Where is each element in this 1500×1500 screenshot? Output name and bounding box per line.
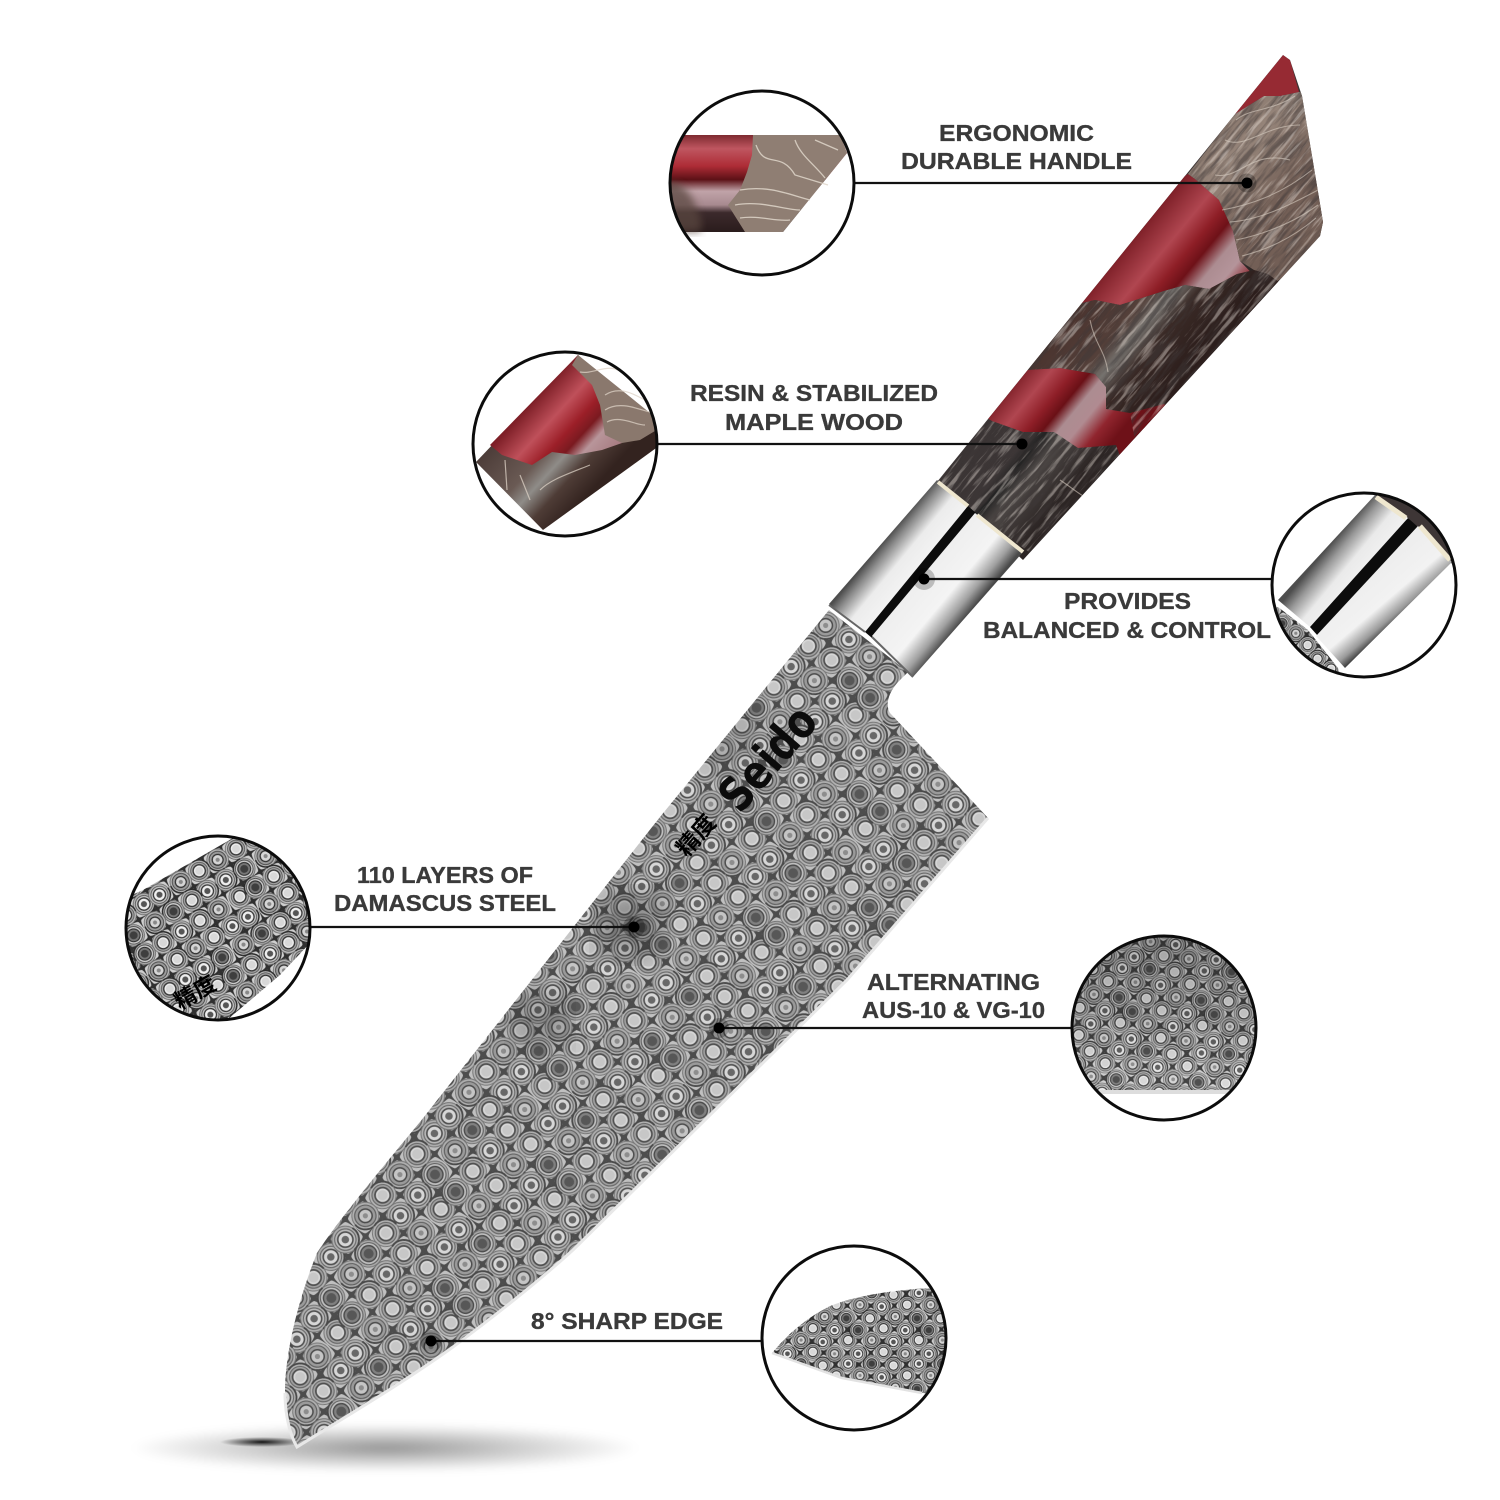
callout: resin pointer [658,438,1028,450]
label: 110 layers of damascus steel: DAMASCUS STEEL [334,890,556,916]
handle: brown stabilized maple cap [1188,92,1323,281]
callout: bolster pointer [913,568,1272,590]
inset: bolster [1270,492,1458,678]
blade with damascus pattern [280,600,1000,1460]
label: ergonomic durable handle: ERGONOMIC [939,120,1094,146]
handle: main red resin [1082,174,1250,305]
inset: alternating steel [1065,930,1265,1120]
handle: wood grain texture [938,92,1322,552]
label: provides balanced and control: PROVIDES [1064,588,1191,614]
handle [334,0,1500,972]
inset: handle end [660,91,854,275]
handle: pale grain lines [1060,96,1318,500]
bolster end shading [829,605,913,677]
label: resin and stabilized maple wood [690,380,938,435]
handle: central dark wood [1028,270,1278,438]
callout: alternating steel pointer [709,1018,1072,1038]
logo: Seido: 精度 [667,806,722,863]
label: alternating aus-10 and vg-10: ALTERNATING [867,969,1040,995]
label: provides balanced and control: BALANCED & CONTROL [983,617,1271,643]
callout: edge pointer [420,1330,761,1352]
callout lines and dots [311,174,1272,1352]
blade cutting edge highlight [285,818,988,1447]
label: provides balanced and control [983,588,1271,643]
label: 8 degree sharp edge: 8° SHARP EDGE [531,1308,723,1334]
label: 110 layers of damascus steel: 110 LAYERS OF [357,862,533,888]
label: resin and stabilized maple wood: MAPLE WOOD [725,409,903,435]
ferrule cream spacers [938,482,1023,552]
logo: Seido [667,695,829,863]
label: alternating aus-10 and vg-10 [862,969,1045,1023]
inset: damascus layers: 精度 [168,966,222,1016]
bolster top half [829,480,968,632]
label: ergonomic durable handle [901,120,1132,174]
bolster groove [865,506,976,638]
label: resin and stabilized maple wood: RESIN & STABILIZED [690,380,938,406]
callout: handle pointer [855,174,1256,192]
label: 110 layers of damascus steel [334,862,556,916]
handle: second red resin [988,368,1165,455]
inset: damascus layers [120,836,320,1020]
bolster lower half [872,513,1023,677]
logo: Seido: Seido [708,695,829,823]
label: ergonomic durable handle: DURABLE HANDLE [901,148,1132,174]
callout: damascus pointer [311,916,645,938]
label: alternating aus-10 and vg-10: AUS-10 & VG-10 [862,997,1045,1023]
inset: blade tip [762,1246,960,1430]
floor shadow under blade tip [130,1424,640,1472]
handle: red tip [1235,55,1299,114]
inset: resin and maple [473,352,670,536]
